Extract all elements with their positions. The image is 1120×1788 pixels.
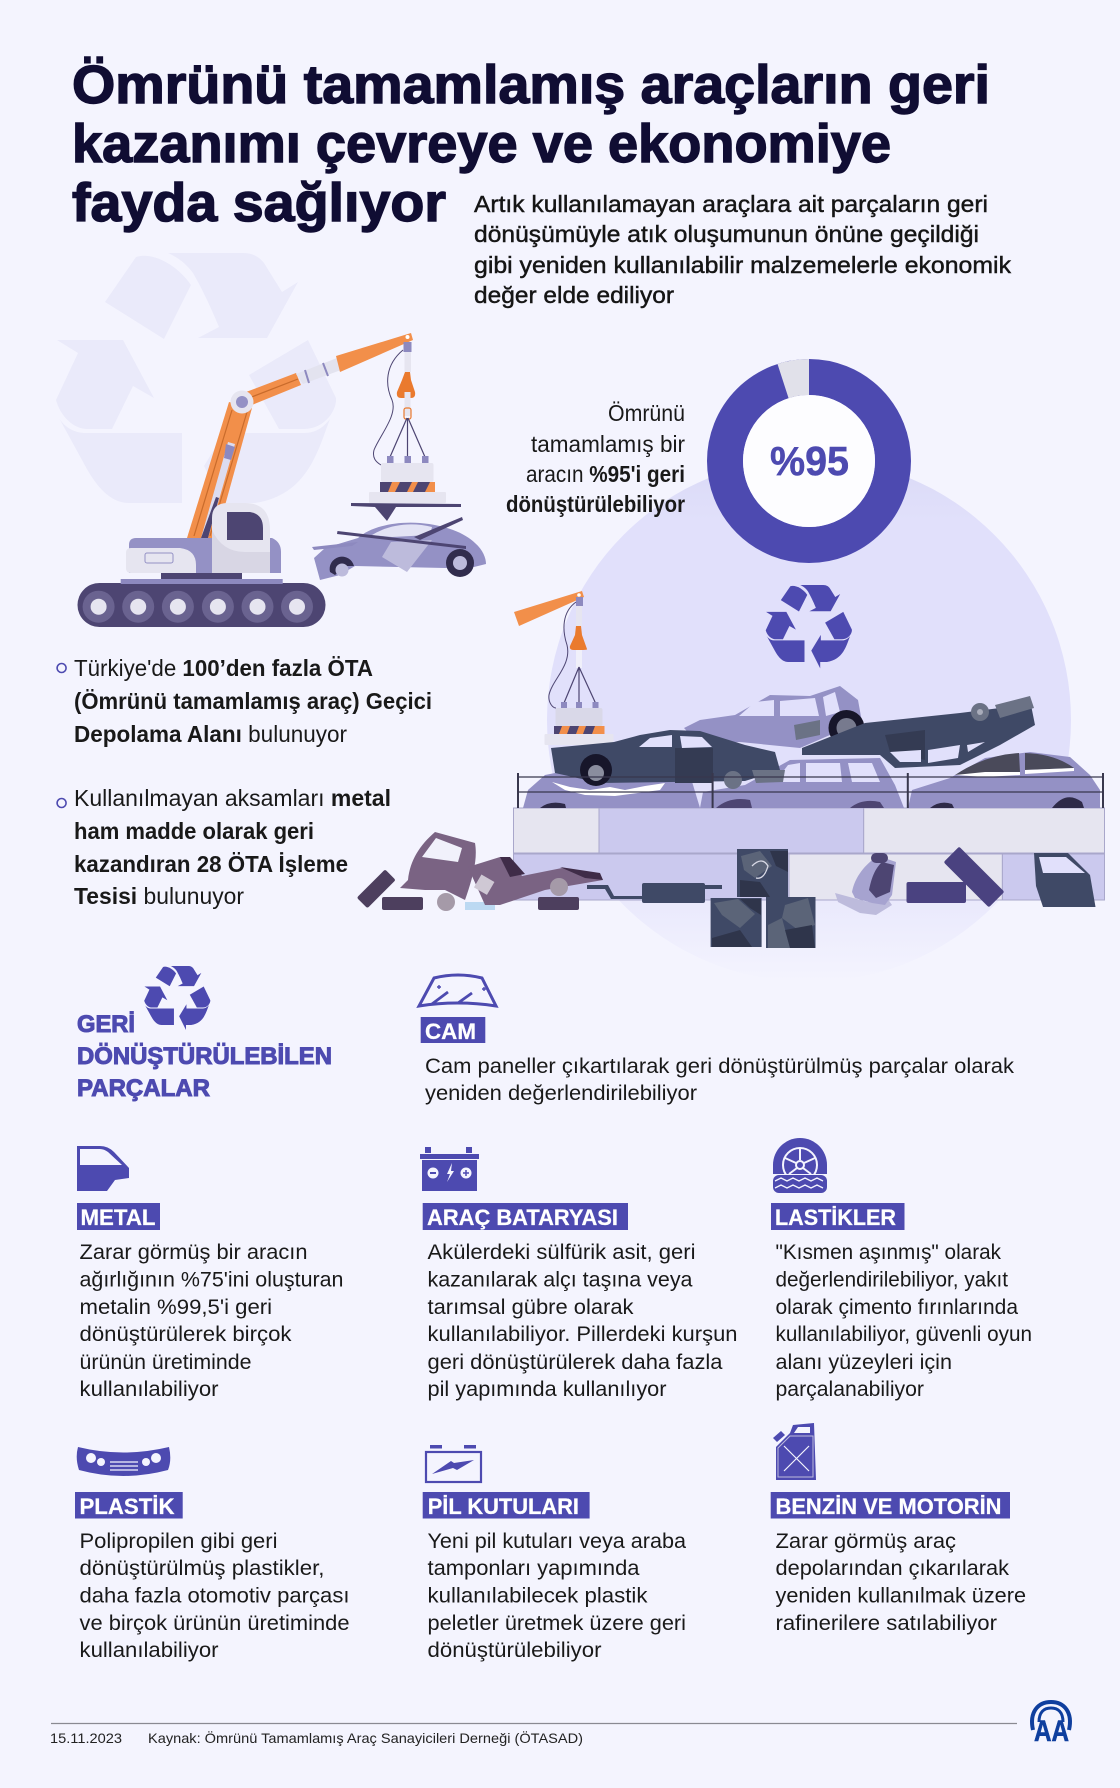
- bullet 1 text: Depolama Alanı bulunuyor: [74, 721, 347, 747]
- battery text: kullanılabiliyor. Pillerdeki kurşun: [428, 1323, 738, 1346]
- battery cases text: tamponları yapımında: [428, 1557, 640, 1580]
- fuel text: Zarar görmüş araç: [776, 1530, 956, 1553]
- metal text: kullanılabiliyor: [80, 1378, 218, 1401]
- glass text: Cam paneller çıkartılarak geri dönüştürülmüş parçalar olarak: [425, 1055, 1015, 1078]
- scrapyard wall: [514, 808, 1104, 900]
- exhaust muffler: [587, 883, 722, 903]
- icon: windshield: [419, 975, 496, 1006]
- car seat: [835, 853, 896, 915]
- big background circle: [547, 458, 1071, 982]
- battery cases text: peletler üretmek üzere geri: [428, 1612, 686, 1635]
- fuel text: depolarından çıkarılarak: [776, 1557, 1010, 1580]
- crane hook and magnet: [369, 342, 446, 503]
- metal text: dönüştürülerek birçok: [80, 1323, 292, 1346]
- panel: plastic: [75, 1447, 350, 1662]
- fence: [518, 773, 1103, 808]
- plastic text: dönüştürülmüş plastikler,: [80, 1557, 324, 1580]
- logo: AA: AA: [1034, 1715, 1069, 1748]
- icon: battery: [420, 1147, 479, 1191]
- icon: jerrycan: [773, 1423, 816, 1480]
- bullet 2 text: Kullanılmayan aksamları metal: [74, 785, 391, 811]
- battery text: Akülerdeki sülfürik asit, geri: [428, 1241, 696, 1264]
- cube right: [766, 897, 816, 948]
- bullet 2 text: [74, 785, 391, 909]
- bullet 1 text: (Ömrünü tamamlamış araç) Geçici: [74, 688, 432, 714]
- tires text: alanı yüzeyleri için: [776, 1351, 952, 1374]
- panel: metal: [77, 1146, 344, 1401]
- tires text: "Kısmen aşınmış" olarak: [776, 1241, 1001, 1264]
- plastic text: kullanılabiliyor: [80, 1639, 218, 1662]
- label: PLASTİK: PLASTİK: [80, 1494, 175, 1519]
- title: fayda sağlıyor: [72, 173, 446, 233]
- icon: car door: [77, 1146, 129, 1191]
- label: ARAÇ BATARYASI: ARAÇ BATARYASI: [427, 1205, 618, 1230]
- tires text: değerlendirilebiliyor, yakıt: [776, 1268, 1008, 1292]
- battery cases text: Yeni pil kutuları veya araba: [428, 1530, 686, 1553]
- bottom middle car: [700, 758, 904, 808]
- crushed metal cubes: [711, 849, 816, 948]
- intro text block: dönüşümüyle atık oluşumunun önüne geçildiği: [474, 221, 979, 247]
- plastic text: [80, 1530, 350, 1662]
- battery cases text: dönüştürülebiliyor: [428, 1639, 602, 1662]
- plastic text: ve birçok ürünün üretiminde: [80, 1612, 350, 1635]
- donut caption: aracın %95'i geri: [526, 461, 685, 487]
- crawler track: [78, 573, 326, 627]
- cube top: [737, 849, 788, 897]
- panel: fuel: [771, 1423, 1026, 1635]
- wrecked truck: [357, 832, 603, 911]
- icon: bumper: [77, 1447, 170, 1476]
- stacked tires: [906, 847, 1004, 907]
- battery cases text: [428, 1530, 686, 1662]
- gray middle car: [684, 686, 864, 748]
- bullet 1 text: Türkiye'de 100’den fazla ÖTA: [74, 655, 373, 681]
- glass text: [425, 1055, 1015, 1105]
- metal text: metalin %99,5'i geri: [80, 1296, 272, 1319]
- metal text: ürünün üretiminde: [80, 1351, 252, 1374]
- bottom left car: [523, 770, 700, 808]
- background recycle symbol: [56, 253, 336, 524]
- icon: tire: [773, 1138, 827, 1193]
- bullet 2 text: kazandıran 28 ÖTA İşleme: [74, 851, 348, 877]
- bullet 1 text: [74, 655, 432, 747]
- footer: [50, 1724, 1017, 1746]
- donut caption: dönüştürülebiliyor: [506, 491, 685, 517]
- donut caption: tamamlamış bir: [531, 431, 685, 457]
- metal text: [80, 1241, 344, 1401]
- label: LASTİKLER: LASTİKLER: [775, 1205, 896, 1230]
- panel: glass: [419, 975, 1015, 1105]
- bullet 2 text: Tesisi bulunuyor: [74, 883, 244, 909]
- bullet 2: [57, 785, 391, 909]
- crane body and cab: [126, 503, 281, 573]
- bottom right car: [908, 752, 1100, 808]
- label: PİL KUTULARI: PİL KUTULARI: [428, 1494, 579, 1519]
- cube left: [711, 898, 762, 947]
- section heading: [77, 1011, 332, 1102]
- donut value: %95: [770, 438, 849, 484]
- title: [72, 55, 990, 233]
- battery text: [428, 1241, 738, 1401]
- crane illustration: [78, 333, 486, 627]
- metal text: ağırlığının %75'ini oluşturan: [80, 1268, 344, 1292]
- panel: car battery: [420, 1147, 738, 1401]
- donut chart 95 percent: [725, 359, 893, 545]
- intro text block: gibi yeniden kullanılabilir malzemelerle ekonomik: [474, 252, 1011, 278]
- front dark car: [551, 730, 785, 789]
- donut caption: Ömrünü: [608, 400, 685, 426]
- icon: battery case: [426, 1445, 481, 1482]
- battery text: kazanılarak alçı taşına veya: [428, 1268, 693, 1292]
- icon: section recycle symbol: [144, 966, 210, 1030]
- label: CAM: CAM: [425, 1019, 476, 1044]
- fuel text: yeniden kullanılmak üzere: [776, 1584, 1026, 1608]
- intro text block: değer elde ediliyor: [474, 282, 674, 308]
- crane arm over scrapyard: [514, 591, 614, 745]
- source: Kaynak: Ömrünü Tamamlamış Araç Sanayicileri Derneği (ÖTASAD): [148, 1729, 583, 1746]
- donut caption: [506, 400, 685, 517]
- fuel text: [776, 1530, 1026, 1635]
- bullet 2 text: ham madde olarak geri: [74, 818, 314, 844]
- label: BENZİN VE MOTORİN: BENZİN VE MOTORİN: [776, 1494, 1002, 1519]
- label: METAL: METAL: [80, 1205, 156, 1230]
- pile of scrapped cars: [518, 686, 1103, 808]
- title: kazanımı çevreye ve ekonomiye: [72, 114, 891, 174]
- glass text: yeniden değerlendirilebiliyor: [425, 1082, 697, 1105]
- tires text: [776, 1241, 1032, 1401]
- tires text: olarak çimento fırınlarında: [776, 1296, 1018, 1319]
- upside-down dark car: [794, 696, 1035, 768]
- fuel text: rafinerilere satılabiliyor: [776, 1612, 997, 1635]
- battery cases text: kullanılabilecek plastik: [428, 1584, 648, 1608]
- logo: AA: [1032, 1702, 1070, 1748]
- intro text block: Artık kullanılamayan araçlara ait parçaların geri: [474, 191, 988, 217]
- bullet 1: [57, 655, 432, 747]
- section heading: PARÇALAR: [77, 1075, 210, 1102]
- intro text block: [474, 191, 1011, 308]
- section heading: DÖNÜŞTÜRÜLEBİLEN: [77, 1043, 332, 1070]
- plastic text: Polipropilen gibi geri: [80, 1530, 278, 1553]
- title: Ömrünü tamamlamış araçların geri: [72, 55, 990, 115]
- wrecked car under magnet: [312, 503, 486, 580]
- section heading: GERİ: [77, 1011, 135, 1038]
- tires text: parçalanabiliyor: [776, 1378, 924, 1401]
- battery text: tarımsal gübre olarak: [428, 1296, 634, 1319]
- crane arm: [187, 333, 413, 538]
- tires text: kullanılabiliyor, güvenli oyun: [776, 1323, 1032, 1346]
- battery text: geri dönüştürülerek daha fazla: [428, 1351, 723, 1374]
- car door: [1034, 853, 1096, 907]
- date: 15.11.2023: [50, 1730, 122, 1746]
- panel: tires: [771, 1138, 1032, 1401]
- metal text: Zarar görmüş bir aracın: [80, 1241, 308, 1264]
- icon: blue recycle symbol: [766, 585, 852, 668]
- panel: battery cases: [423, 1445, 686, 1662]
- plastic text: daha fazla otomotiv parçası: [80, 1584, 350, 1608]
- battery text: pil yapımında kullanılıyor: [428, 1378, 666, 1401]
